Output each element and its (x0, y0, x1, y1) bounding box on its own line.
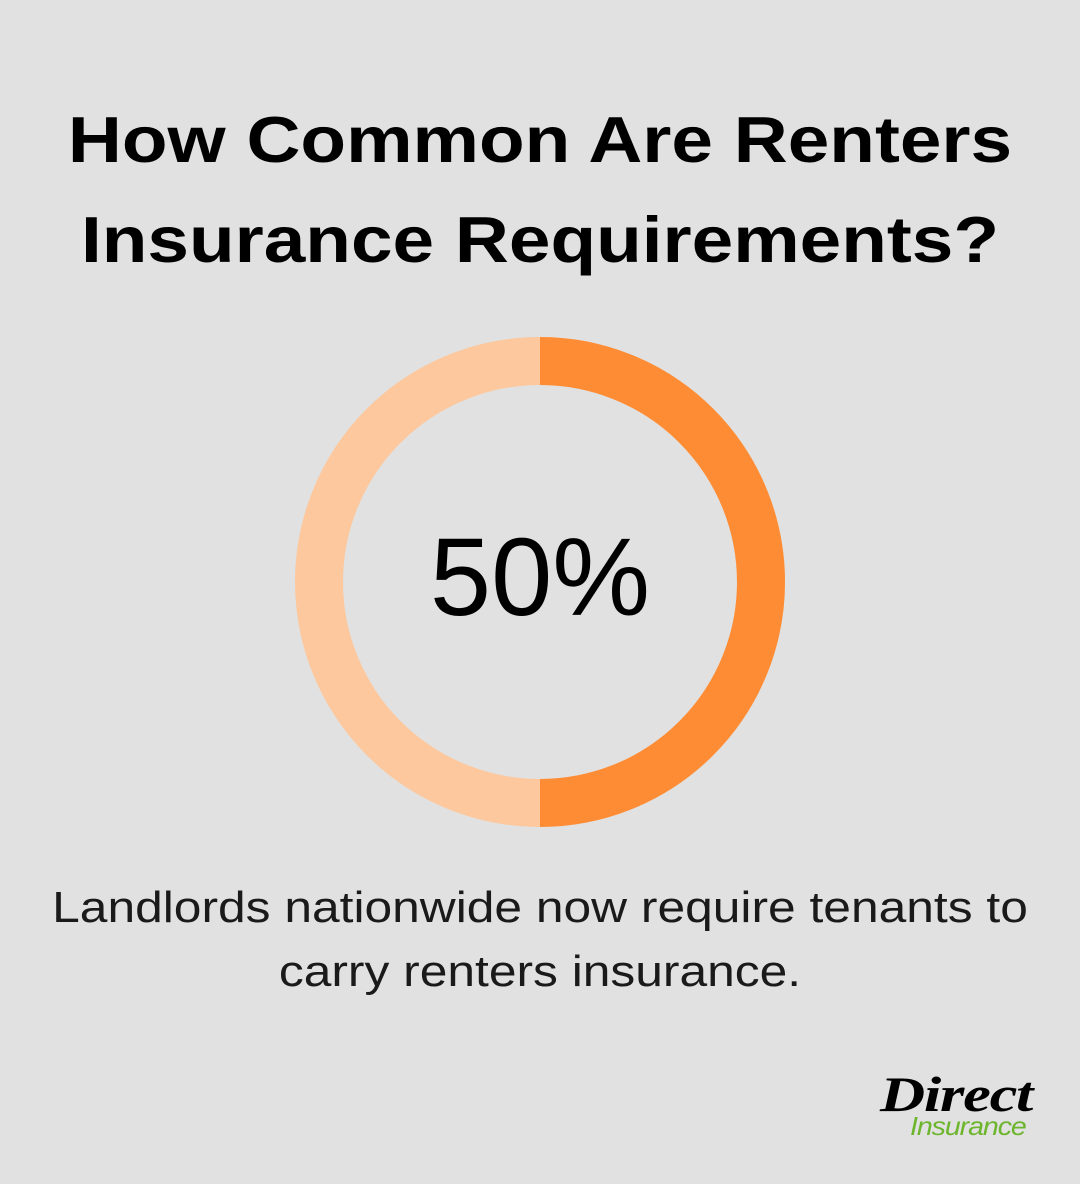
logo: Direct (880, 1066, 1032, 1122)
logo: Insurance (910, 1111, 1026, 1141)
description text: carry renters insurance. (279, 947, 801, 996)
description text: Landlords nationwide now require tenants to (52, 883, 1028, 932)
title (68, 103, 1012, 276)
title: How Common Are Renters (68, 103, 1012, 176)
description text (52, 883, 1028, 996)
title: Insurance Requirements? (81, 203, 999, 276)
donut chart: 50% (430, 516, 650, 639)
